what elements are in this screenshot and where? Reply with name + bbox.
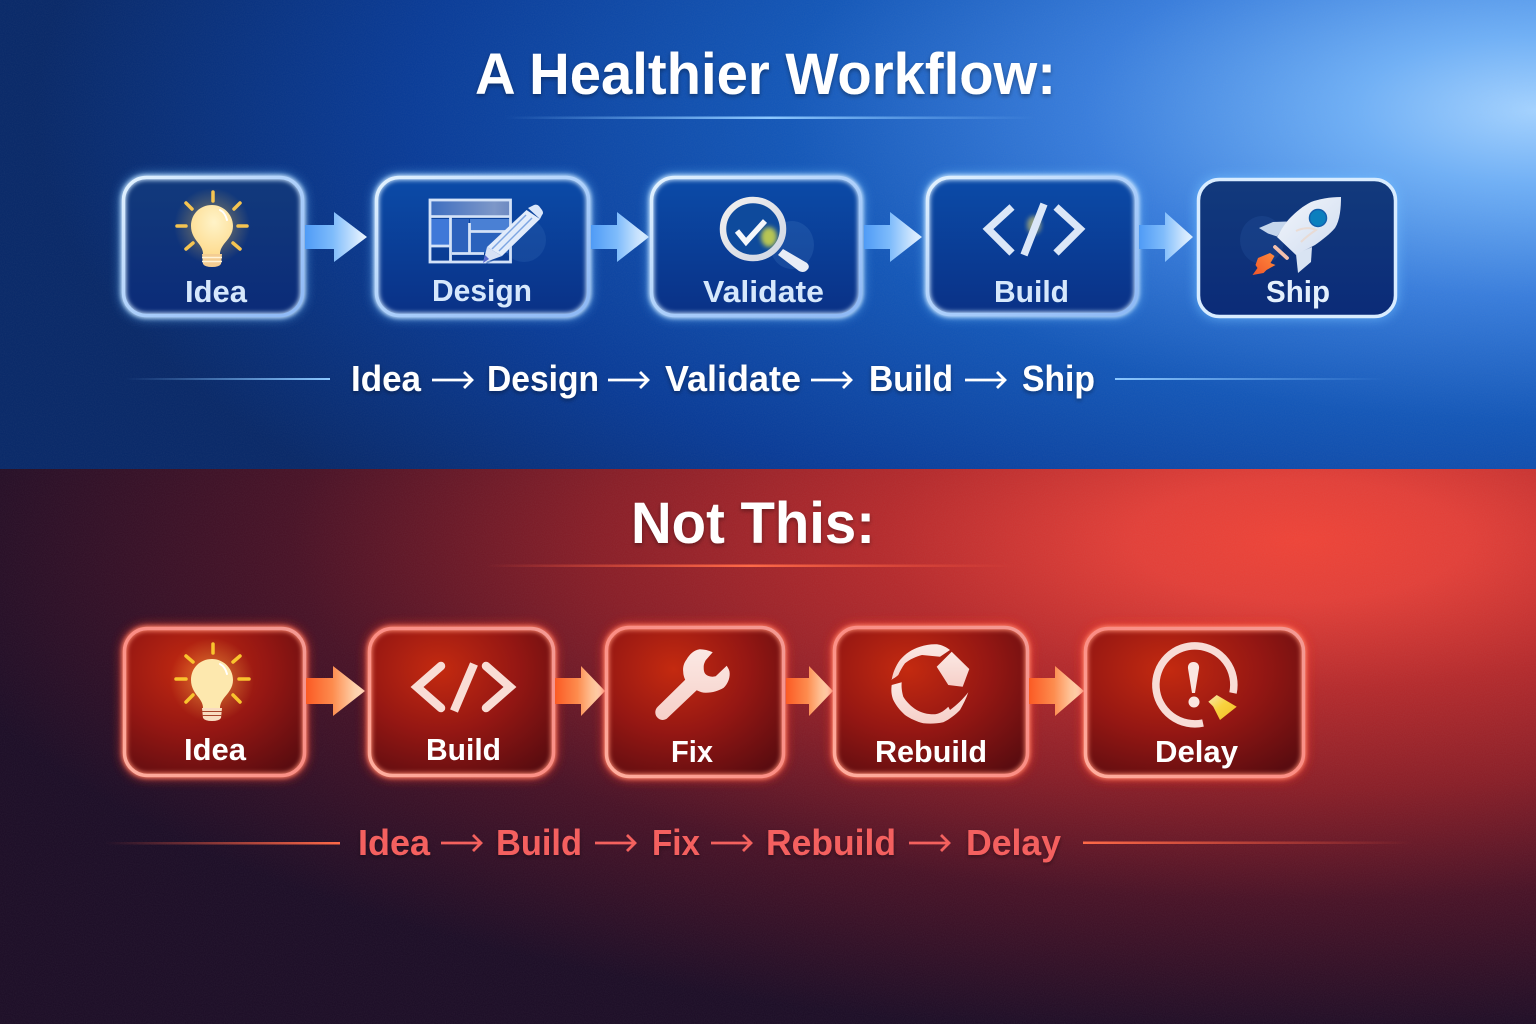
flow summary: unhealthy: Delay: [966, 822, 1061, 863]
panel: healthier workflow background: [0, 0, 1536, 469]
label: Validate: Validate: [703, 274, 824, 309]
label: Delay: Delay: [1155, 734, 1239, 769]
icon: wireframe and pencil: [430, 200, 546, 264]
label: Build: Build: [426, 732, 501, 767]
flow summary: healthy: [125, 358, 1385, 399]
label: Ship: Ship: [1266, 274, 1330, 309]
arrow 1 (blue): [305, 212, 367, 262]
label: Fix: Fix: [671, 734, 714, 769]
panel: not this background: [0, 469, 1536, 1024]
arrow 4 (blue): [1139, 212, 1193, 262]
label: Rebuild: Rebuild: [875, 734, 987, 769]
flow summary: healthy: Design: [487, 358, 599, 399]
flow summary: unhealthy: Build: [496, 822, 582, 863]
icon: code brackets: [988, 204, 1080, 255]
box: Validate (blue): [650, 176, 862, 317]
flow summary: unhealthy: Rebuild: [766, 822, 896, 863]
box: Fix (red): [605, 626, 785, 778]
arrow 4 (red): [1029, 666, 1084, 716]
icon: code brackets: [417, 664, 510, 711]
flow summary: unhealthy: [105, 822, 1413, 863]
box: Delay (red): [1084, 627, 1305, 778]
flow summary: healthy: Validate: [665, 358, 801, 399]
box: Build (blue): [926, 176, 1138, 316]
box: Design (blue): [375, 176, 590, 317]
arrow 2 (red): [555, 666, 605, 716]
label: Idea: Idea: [184, 732, 247, 767]
flow summary: unhealthy: Idea: [358, 822, 431, 863]
icon: light bulb: [174, 188, 250, 267]
box: Idea (blue): [122, 176, 304, 317]
arrow 3 (red): [786, 666, 833, 716]
box: Build (red): [368, 627, 555, 777]
arrow 2 (blue): [591, 212, 649, 262]
arrow 3 (blue): [864, 212, 922, 262]
box: Idea (red): [123, 627, 306, 777]
box: Rebuild (red): [833, 626, 1029, 777]
title: A Healthier Workflow: A Healthier Workflow:: [475, 42, 1056, 107]
flow summary: healthy: Ship: [1022, 358, 1095, 399]
icon: magnifier with check: [723, 200, 814, 272]
icon: rocket: [1240, 197, 1341, 275]
title: Not This: Not This:: [631, 491, 875, 556]
label: Design: Design: [432, 273, 532, 308]
flow summary: unhealthy: Fix: [652, 822, 700, 863]
arrow 1 (red): [306, 666, 365, 716]
icon: wrench: [655, 649, 730, 720]
icon: delay alert clock: [1156, 646, 1237, 724]
label: Idea: Idea: [185, 274, 248, 309]
box: Ship (blue): [1197, 178, 1397, 318]
icon: light bulb: [170, 638, 254, 722]
flow summary: healthy: Idea: [351, 358, 422, 399]
icon: rebuild cycle: [891, 644, 969, 724]
label: Build: Build: [994, 274, 1069, 309]
flow summary: healthy: Build: [869, 358, 953, 399]
